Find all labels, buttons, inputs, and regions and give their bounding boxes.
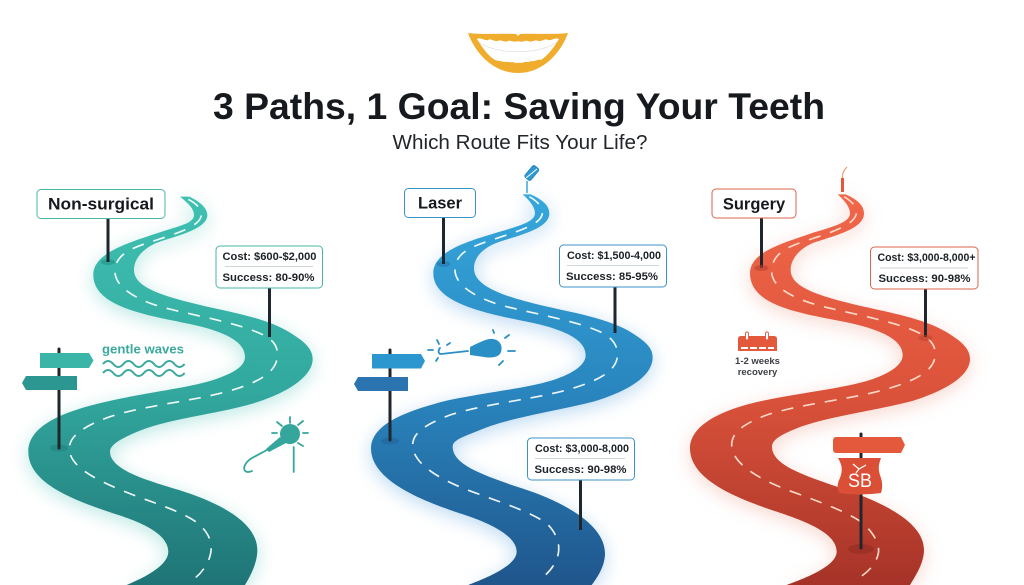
callout: cost and success: Cost: $600-$2,000	[222, 251, 316, 263]
label: Non-surgical	[37, 190, 165, 265]
callout: cost and success	[870, 247, 978, 341]
label: Laser: Laser	[418, 194, 463, 212]
signpost with SB badge: SB	[848, 471, 872, 492]
red winding road	[690, 194, 970, 585]
icon: laser light	[428, 330, 515, 365]
label: Non-surgical: Non-surgical	[48, 194, 154, 214]
gentle waves label	[102, 342, 185, 376]
title: 3 Paths, 1 Goal: Saving Your Teeth	[213, 86, 825, 127]
callout: cost and success	[216, 246, 322, 337]
blue winding road	[371, 194, 653, 585]
recovery text: recovery	[738, 367, 778, 378]
label: Laser	[404, 188, 476, 267]
label: Surgery: Surgery	[723, 196, 786, 214]
panel: laser path	[354, 165, 666, 585]
callout: cost and success lower	[528, 438, 634, 530]
teal winding road	[28, 197, 313, 585]
signpost	[354, 350, 425, 444]
icon: smile logo	[468, 33, 568, 73]
subtitle: Which Route Fits Your Life?	[392, 131, 648, 154]
recovery text: 1-2 weeks	[735, 356, 780, 367]
gentle waves label: gentle waves	[102, 342, 184, 356]
callout: cost and success lower: Success: 90-98%	[534, 464, 627, 476]
callout: cost and success upper: Success: 85-95%	[566, 271, 658, 283]
icon: recovery calendar	[738, 332, 777, 351]
icon: mirror light	[244, 417, 308, 472]
signpost with SB badge	[833, 434, 905, 554]
panel: surgery path	[690, 167, 978, 585]
callout: cost and success: Success: 90-98%	[878, 273, 971, 285]
callout: cost and success: Success: 80-90%	[222, 272, 315, 284]
panel: non-surgical path	[22, 190, 322, 585]
icon: dental tool on top	[524, 165, 539, 193]
callout: cost and success upper: Cost: $1,500-4,000	[567, 250, 661, 262]
callout: cost and success lower: Cost: $3,000-8,000	[535, 443, 629, 455]
icon: surgical tool on top	[842, 167, 847, 192]
callout: cost and success upper	[560, 245, 666, 333]
callout: cost and success: Cost: $3,000-8,000+	[878, 252, 976, 264]
label: Surgery	[712, 189, 796, 271]
recovery text	[735, 356, 780, 378]
signpost	[22, 349, 94, 452]
